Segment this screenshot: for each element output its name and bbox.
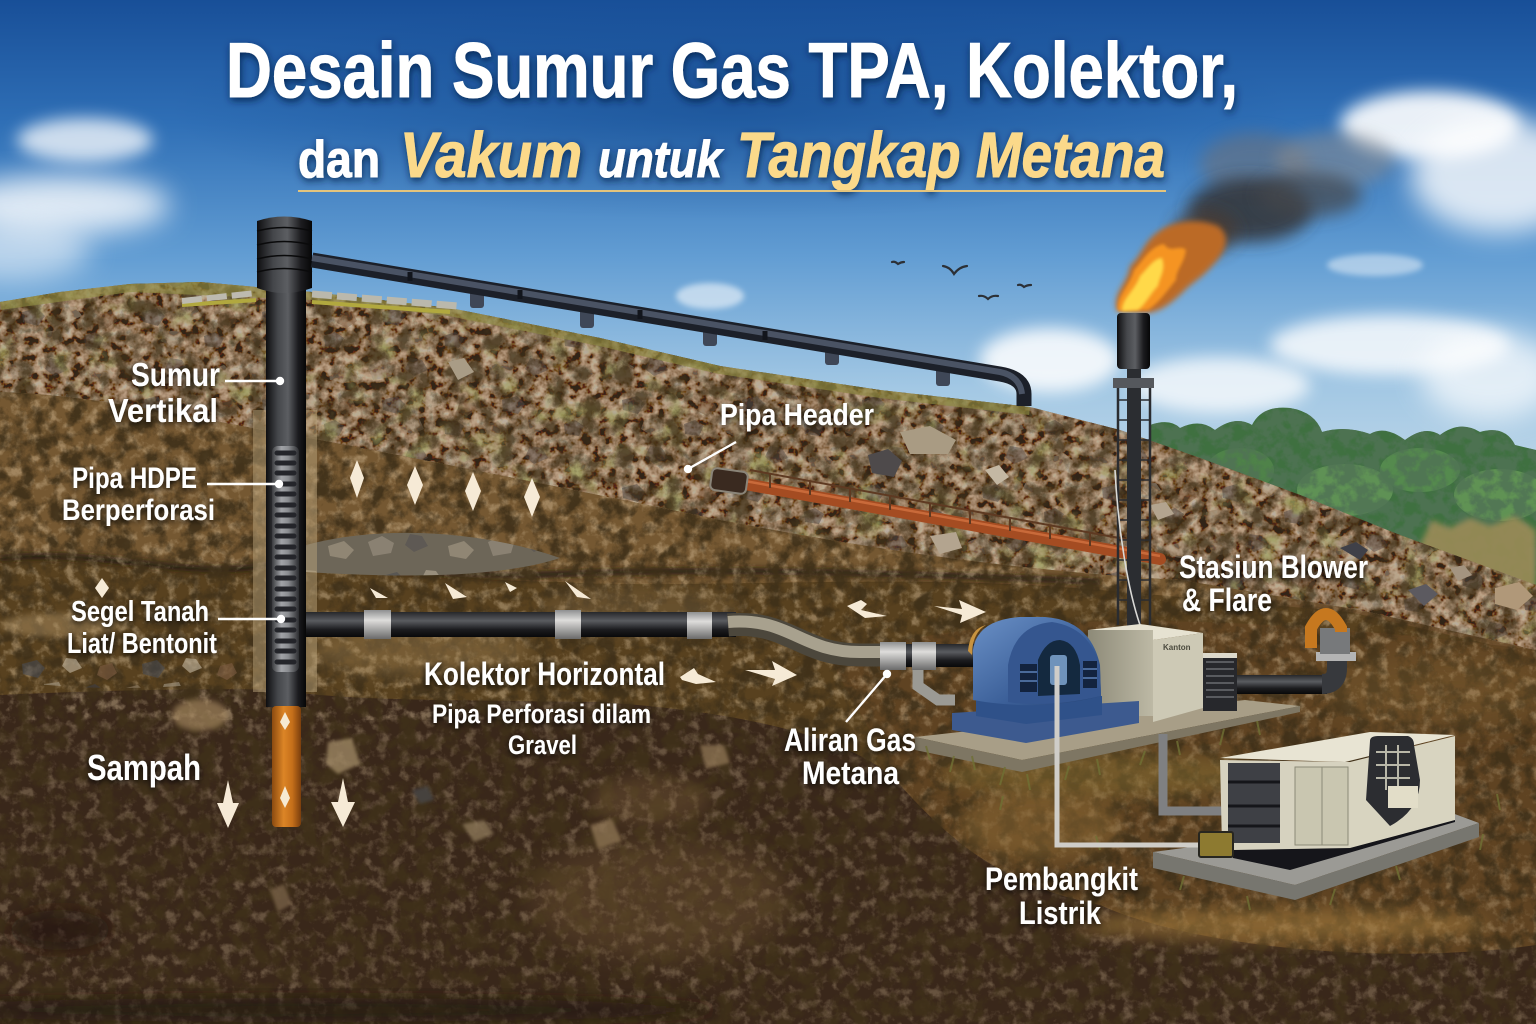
blower base bbox=[952, 701, 1139, 743]
hill: rubble surface bbox=[0, 270, 1536, 660]
generator right side bbox=[1350, 736, 1455, 848]
generator top bbox=[1220, 732, 1455, 762]
panel: vertical well bbox=[257, 216, 312, 827]
yellow junction box bbox=[1199, 832, 1233, 857]
collector couplers bbox=[364, 610, 712, 639]
well perforated section bbox=[272, 446, 299, 672]
gravel lens bbox=[306, 533, 560, 575]
tip arrows bbox=[280, 712, 290, 808]
flare tower lattice bbox=[1118, 380, 1150, 625]
blower face bbox=[1038, 640, 1080, 696]
panel: flare stack bbox=[1113, 132, 1395, 627]
icon: birds bbox=[892, 262, 1031, 299]
label: Stasiun Blower & Flare: Stasiun Blower bbox=[1179, 549, 1368, 585]
label: Aliran Gas Metana bbox=[784, 722, 916, 791]
lower waste layer bbox=[0, 689, 1536, 1024]
well casing bbox=[266, 285, 306, 707]
panel: blower station: Kanton bbox=[1163, 643, 1191, 652]
generator front bbox=[1220, 760, 1350, 850]
blower copper collar bbox=[968, 625, 986, 655]
well orange tip bbox=[272, 706, 301, 827]
small branch pipe bbox=[918, 670, 955, 700]
leader lines bbox=[207, 378, 890, 722]
label: Pembangkit Listrik: Listrik bbox=[1019, 895, 1101, 931]
header line bbox=[312, 258, 1024, 406]
large rocks on slope bbox=[448, 358, 1533, 610]
generator grille bbox=[1366, 736, 1420, 826]
label: Sumur Vertikal bbox=[108, 356, 220, 429]
generator slab bbox=[1153, 813, 1479, 885]
label: Pembangkit Listrik: Pembangkit bbox=[985, 861, 1138, 897]
well slots bbox=[277, 453, 294, 662]
generator louver bbox=[1228, 763, 1280, 843]
orange hook bbox=[1311, 614, 1341, 648]
label: Pipa Perforasi dilam Gravel: Gravel bbox=[508, 730, 577, 760]
label: Segel Tanah Liat/ Bentonit: Segel Tanah bbox=[71, 596, 209, 628]
panel: blower station bbox=[915, 614, 1356, 772]
arrows: gas flow bbox=[95, 460, 986, 828]
flare tip bbox=[1117, 313, 1150, 369]
title glow bbox=[170, 0, 1290, 220]
right ground bbox=[1494, 645, 1534, 654]
label: Pipa HDPE Berperforasi: Berperforasi bbox=[62, 494, 215, 527]
wellhead cap bbox=[257, 216, 312, 293]
return pipe right bbox=[1237, 675, 1327, 694]
generator doors bbox=[1295, 767, 1348, 845]
label: Pipa Header: Pipa Header bbox=[720, 397, 874, 432]
title line 2: Vakum bbox=[400, 119, 582, 191]
collector pipe, black section bbox=[306, 612, 736, 637]
panel: orange surface pipe bbox=[710, 468, 1160, 559]
hill: soil layers bbox=[0, 380, 1536, 1024]
title line 2: dan bbox=[298, 131, 380, 189]
label: Sumur Vertikal: Sumur bbox=[131, 356, 220, 393]
collector pipe to blower bbox=[880, 644, 980, 667]
generator black base bbox=[1233, 815, 1455, 870]
label: Aliran Gas Metana: Aliran Gas bbox=[784, 722, 916, 758]
panel: horizontal gas collector bbox=[253, 410, 980, 700]
upper soil band bbox=[0, 392, 1298, 600]
label: Segel Tanah Liat/ Bentonit bbox=[67, 596, 217, 660]
blower dome bbox=[973, 617, 1101, 705]
label: Sampah: Sampah bbox=[87, 747, 201, 788]
dark stratum line bbox=[0, 556, 1100, 582]
label: Pipa Perforasi dilam Gravel: Pipa Perforasi dilam bbox=[432, 699, 651, 729]
label: Segel Tanah Liat/ Bentonit: Liat/ Bentonit bbox=[67, 628, 217, 660]
label: Sumur Vertikal: Vertikal bbox=[108, 392, 218, 429]
middle layer bbox=[0, 556, 1486, 786]
sand backfill around well bbox=[253, 410, 317, 692]
title line 2: Tangkap Metana bbox=[737, 119, 1165, 191]
smoke bbox=[1173, 132, 1395, 254]
title underline bbox=[298, 190, 1166, 192]
label: Kolektor Horizontal: Kolektor Horizontal bbox=[424, 656, 665, 692]
label: Stasiun Blower & Flare: & Flare bbox=[1182, 582, 1272, 618]
collector bend, tan section bbox=[728, 622, 885, 655]
grass tufts bbox=[926, 721, 1500, 910]
label: Pipa HDPE Berperforasi: Pipa HDPE bbox=[72, 462, 197, 495]
title line 1: Desain Sumur Gas TPA, Kolektor, bbox=[226, 26, 1238, 114]
label: Pembangkit Listrik bbox=[985, 861, 1138, 931]
label: Aliran Gas Metana: Metana bbox=[802, 755, 899, 791]
title line 2: untuk bbox=[598, 131, 725, 189]
flare riser bbox=[1127, 365, 1141, 627]
title bbox=[226, 26, 1238, 191]
label: Stasiun Blower & Flare bbox=[1179, 549, 1368, 618]
enclosure bbox=[1088, 624, 1203, 640]
clouds bbox=[0, 91, 1536, 419]
blower front ring bbox=[1008, 622, 1101, 704]
panel: header pipe bbox=[312, 258, 1024, 406]
header supports bbox=[470, 282, 950, 386]
flame bbox=[1116, 221, 1226, 313]
label: Pipa Perforasi dilam Gravel bbox=[432, 699, 651, 760]
flare platform bbox=[1113, 378, 1154, 388]
gray conduit pipes bbox=[1163, 734, 1229, 811]
label: Pipa HDPE Berperforasi bbox=[62, 462, 215, 527]
forest background bbox=[1150, 400, 1536, 600]
concrete pad bbox=[915, 700, 1300, 760]
hill: striped liner at crest bbox=[182, 293, 458, 312]
louver box bbox=[1203, 653, 1237, 711]
title line 2 bbox=[298, 119, 1165, 191]
panel: generator bbox=[1057, 666, 1479, 900]
